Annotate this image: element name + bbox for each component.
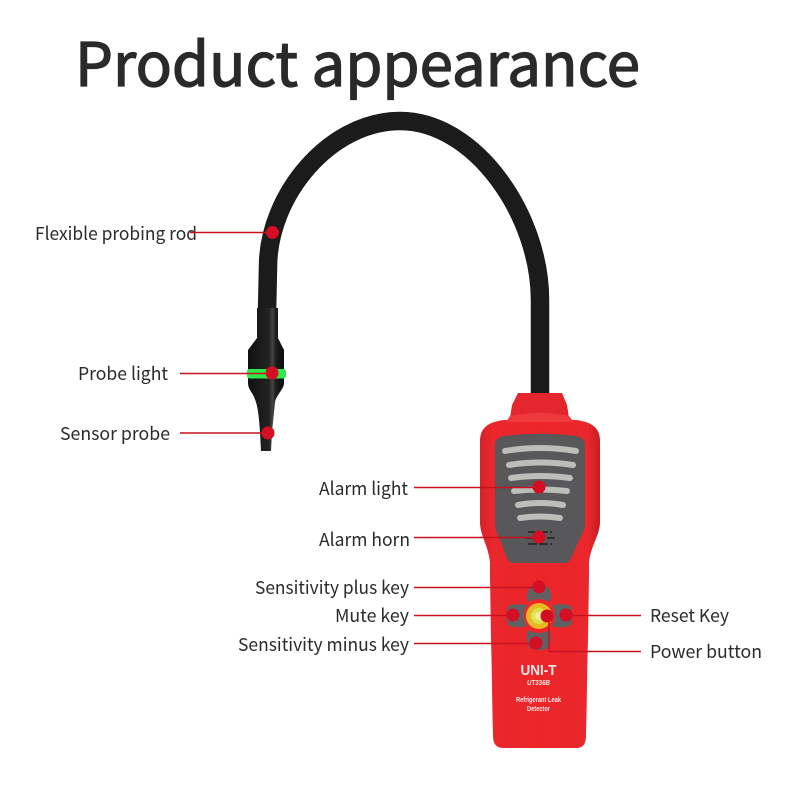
callout: reset key: Reset Key [650, 602, 730, 628]
key pad [506, 585, 572, 650]
callout: sensitivity plus key [255, 574, 546, 600]
callout: alarm light: Alarm light [319, 475, 408, 501]
callout: sensitivity plus key: Sensitivity plus key [255, 574, 410, 600]
callout: probe light: Probe light [78, 360, 168, 386]
sensor probe and probe light [247, 308, 286, 451]
callout: sensor probe [60, 420, 274, 446]
callout: reset key [560, 602, 730, 628]
hand grip [480, 420, 600, 748]
callout: sensitivity minus key [238, 631, 542, 657]
alarm horn slots [525, 532, 555, 544]
callout: flexible probing rod [35, 220, 279, 246]
callout: sensor probe: Sensor probe [60, 420, 170, 446]
brand logo: UNI-T [520, 662, 556, 679]
product name: Refrigerant Leak [516, 695, 562, 704]
alarm panel [495, 434, 585, 563]
callout: probe light [78, 360, 278, 386]
callout: flexible probing rod: Flexible probing rod [35, 220, 197, 246]
title: Product appearance [75, 17, 640, 104]
callout: alarm horn: Alarm horn [319, 526, 410, 552]
neck [510, 393, 569, 418]
alarm light bars [505, 448, 576, 518]
flexible probing rod hose [267, 121, 540, 396]
detector body [480, 393, 600, 748]
model number: UT336B [527, 678, 550, 687]
callout: mute key [335, 602, 520, 628]
product name: Detector [527, 704, 550, 713]
product name [516, 695, 562, 713]
callout: power button [540, 610, 762, 664]
power button [526, 603, 552, 629]
callout: alarm horn [319, 526, 546, 552]
callout: sensitivity minus key: Sensitivity minus key [238, 631, 410, 657]
callout: power button: Power button [650, 638, 762, 664]
callout: alarm light [319, 475, 546, 501]
probe light band [247, 369, 286, 378]
callout: mute key: Mute key [335, 602, 410, 628]
